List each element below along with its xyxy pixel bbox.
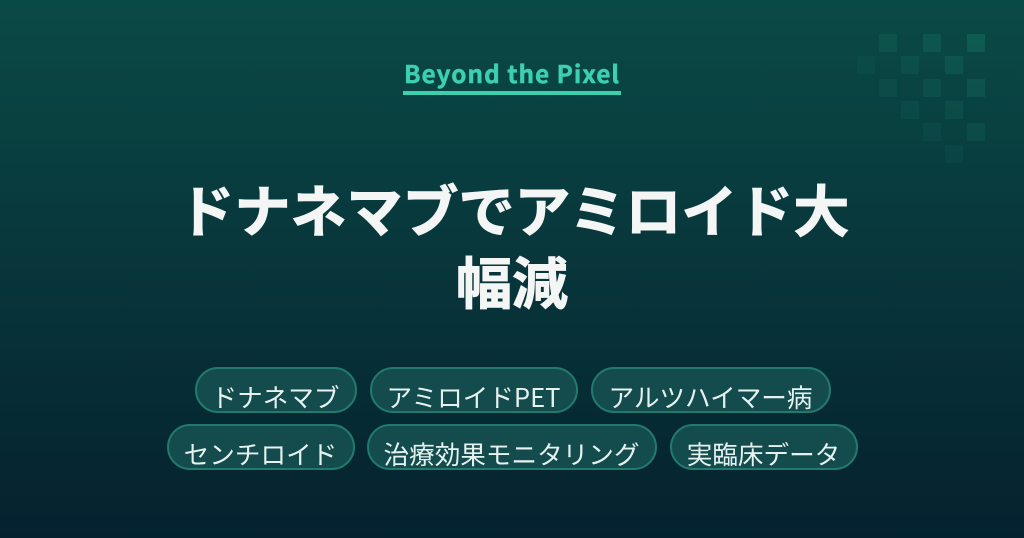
tag: アルツハイマー病: アルツハイマー病: [608, 378, 812, 415]
title: [179, 168, 849, 321]
tag: センチロイド: [167, 424, 355, 470]
tag: センチロイド: センチロイド: [184, 435, 337, 472]
title: 幅減: [456, 240, 568, 321]
tag: 治療効果モニタリング: 治療効果モニタリング: [384, 435, 639, 472]
brand label with underline: Beyond the Pixel: [404, 55, 620, 90]
tag: アルツハイマー病: [591, 367, 831, 412]
tag: 治療効果モニタリング: [367, 424, 657, 470]
tag: ドナネマブ: [195, 367, 357, 412]
tag: アミロイドPET: アミロイドPET: [386, 378, 561, 415]
decorative pixel grid: [879, 34, 985, 141]
tag: 実臨床データ: 実臨床データ: [687, 435, 840, 472]
tag: ドナネマブ: ドナネマブ: [212, 378, 339, 415]
tag: アミロイドPET: [370, 367, 578, 412]
title: ドナネマブでアミロイド大: [179, 168, 849, 249]
tag: 実臨床データ: [670, 424, 858, 470]
